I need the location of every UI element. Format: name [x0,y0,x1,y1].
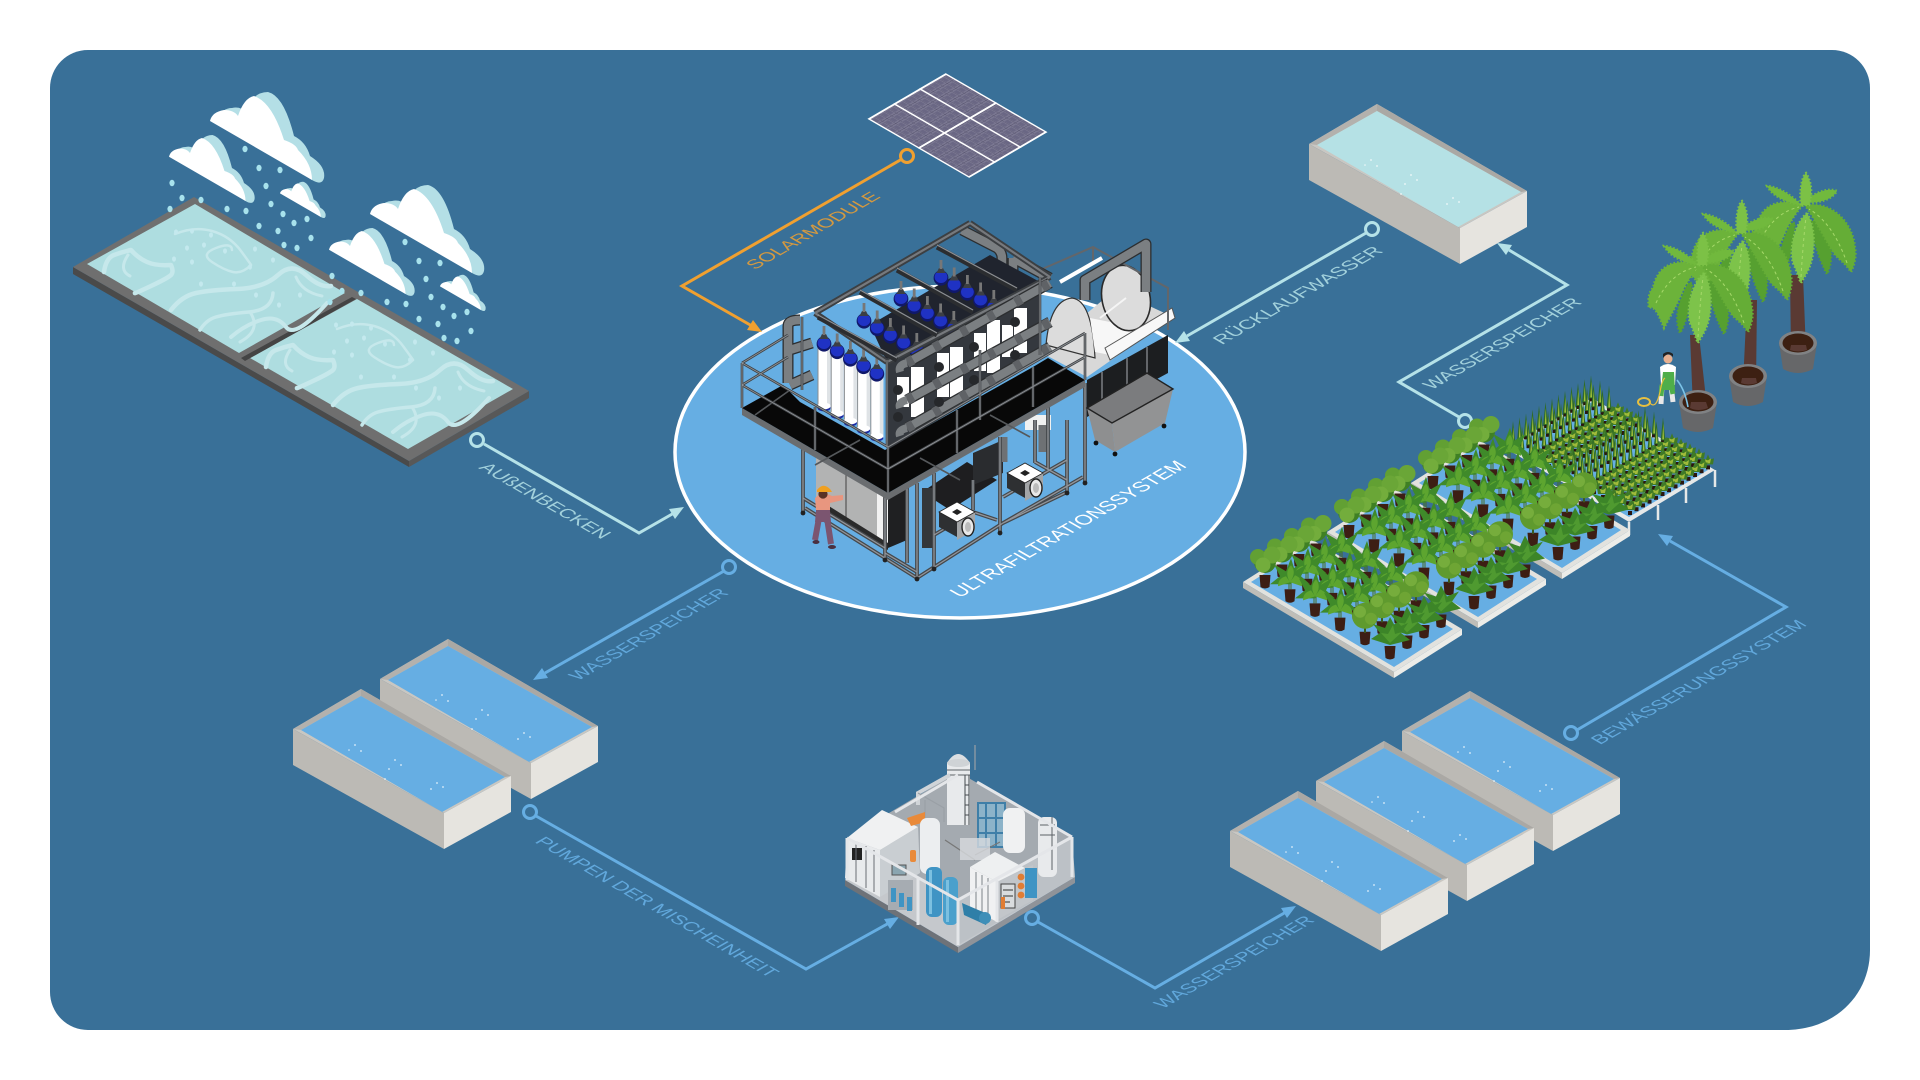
worker figure [812,486,843,549]
connector: water storage left [533,560,736,680]
palm 3 [1751,173,1856,373]
clouds [169,92,486,311]
palm 2 [1687,201,1792,406]
tower and pipes [907,745,1057,877]
solar panels [869,74,1046,177]
mixing unit [845,745,1075,953]
blue vessels and motor [910,850,991,925]
connector: outdoor basin [470,434,684,533]
label: outdoor basin: AUßENBECKEN [475,460,616,542]
label: return water: RÜCKLAUFWASSER [1208,243,1387,347]
black deck [742,357,1085,500]
connector: irrigation system [1564,534,1786,740]
outdoor basin with rain clouds [73,92,529,467]
lower frame, cabinet and pumps [801,383,1087,581]
central ellipse platform [675,286,1245,618]
top frame beams [815,223,1050,362]
collection bin [1087,373,1173,456]
gardener [1638,352,1688,407]
connector: mixing unit pumps [524,806,899,969]
right drum filter section [1040,244,1175,456]
white frame rails [847,775,1072,945]
label: lower water storage: WASSERSPEICHER [1149,913,1319,1011]
rain drops [167,146,474,401]
potted plants on water trays [1243,416,1630,678]
basin frame [73,197,529,467]
right cabinet and panel [970,852,1037,922]
label: irrigation system: BEWÄSSERUNGSSYSTEM [1586,617,1811,747]
housing and rooms [845,772,1075,945]
label: mixing unit pumps: PUMPEN DER MISCHEINHEIT [531,834,783,980]
palm trees with gardener [1638,173,1856,432]
label: ultrafiltration system: ULTRAFILTRATIONSSYSTEM [945,458,1192,601]
manifold pipes and valves [893,283,1050,436]
base plate [845,813,1075,953]
storage tanks lower left [293,639,598,849]
tray middle [1327,465,1546,628]
connector: return water [1175,222,1378,343]
connector: solar modules [682,150,914,332]
connector: lower water storage [1026,906,1296,988]
membrane modules [817,255,1040,450]
ultrafiltration system machine [742,223,1175,581]
palm 1 [1648,233,1753,432]
connector: water storage to upper tank [1399,243,1567,428]
tray front [1243,515,1462,678]
tray back [1411,416,1630,579]
spiky plants on raised table [1505,375,1715,535]
label: water storage upper: WASSERSPEICHER [1418,295,1586,392]
guard rails [742,277,1085,493]
back pipework [788,230,1050,385]
tank: upper return water tank [1309,104,1527,264]
label: water storage left: WASSERSPEICHER [564,585,733,683]
label: solar modules: SOLARMODULE [741,189,885,272]
storage tanks lower right [1230,691,1620,951]
